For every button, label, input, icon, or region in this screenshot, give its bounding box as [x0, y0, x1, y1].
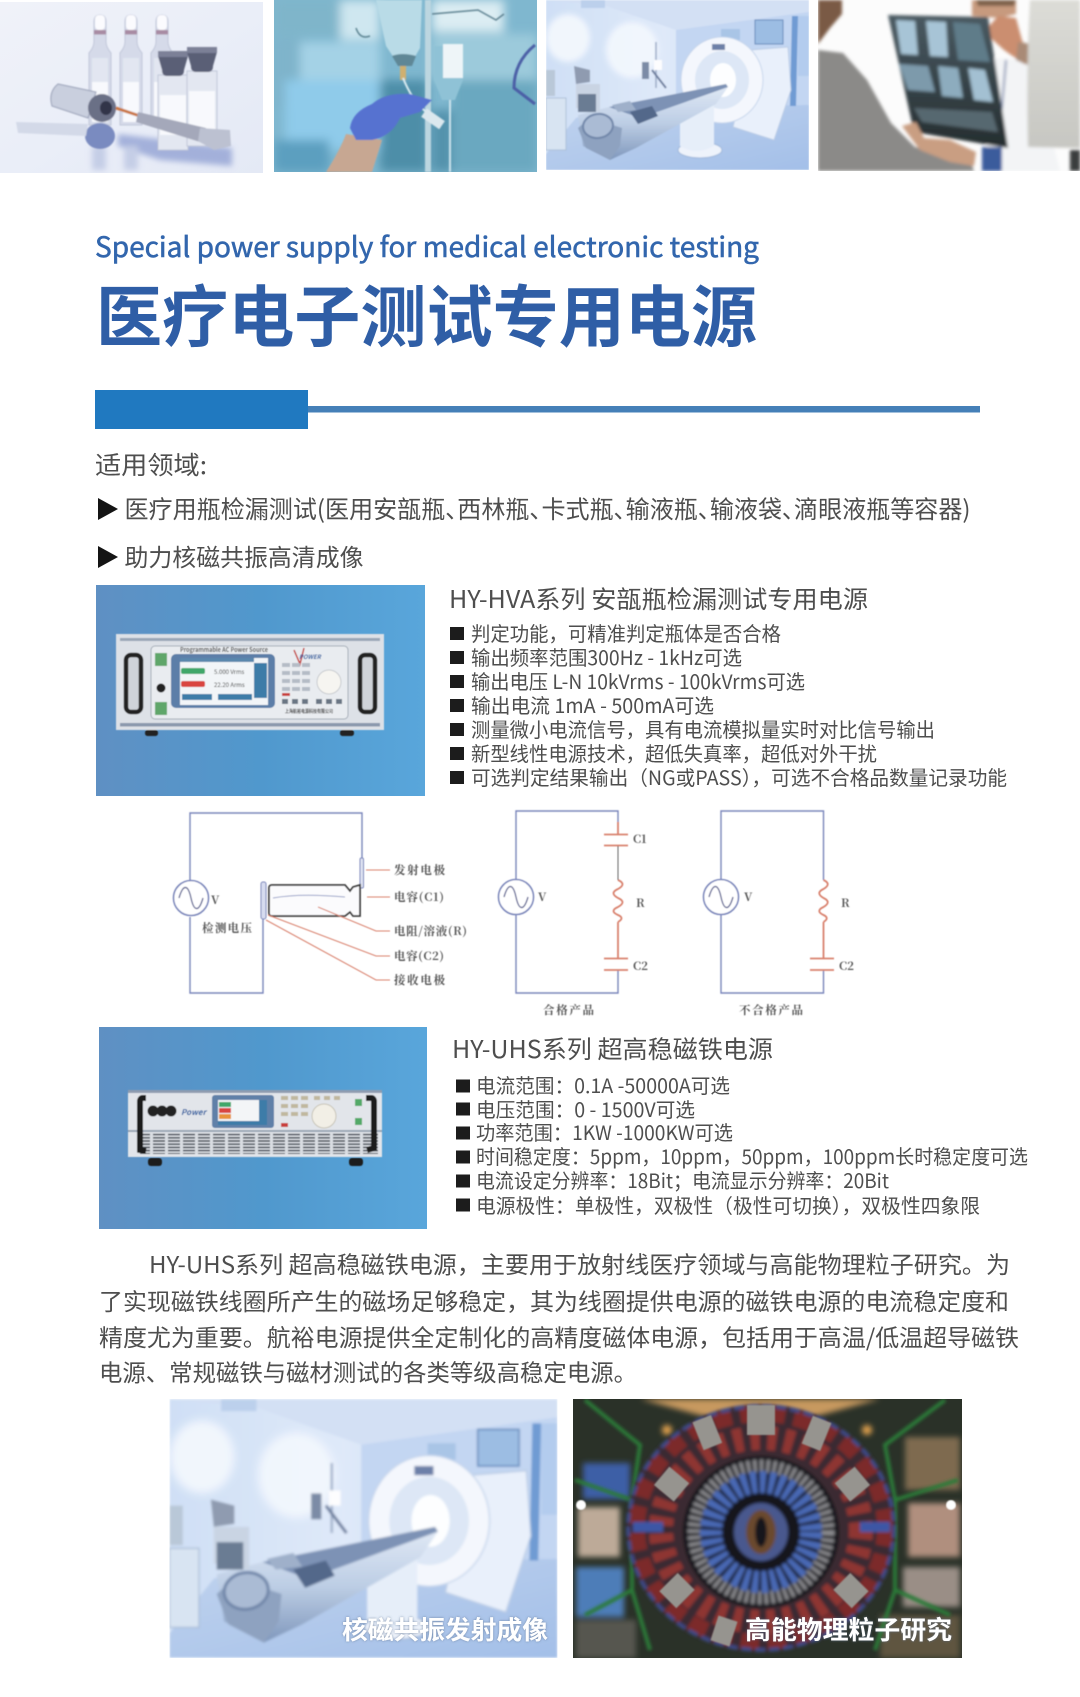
callout labels: 电容(C1)	[394, 889, 444, 905]
HY-HVA feature list	[450, 618, 1007, 791]
photo: particle physics detector with caption	[573, 1399, 962, 1658]
brand and title text: POWER	[299, 652, 322, 661]
caption: MRI: 核磁共振发射成像	[342, 1610, 548, 1647]
monitor	[1027, 0, 1080, 148]
HY-HVA heading: HY-HVA系列 安瓿瓶检漏测试专用电源	[449, 581, 868, 616]
description paragraph: 精度尤为重要。航裕电源提供全定制化的高精度磁体电源，包括用于高温/低温超导磁铁	[99, 1319, 1019, 1353]
ampoules	[89, 15, 173, 125]
touch screen: 5.000 Vrms	[214, 667, 245, 676]
logo: Power	[181, 1107, 208, 1118]
photo: CT scanner room	[546, 0, 809, 170]
feet	[148, 1158, 363, 1166]
description paragraph: 电源、常规磁铁与磁材测试的各类等级高稳定电源。	[99, 1354, 637, 1388]
HY-HVA feature list: 测量微小电流信号，具有电流模拟量实时对比信号输出	[471, 714, 935, 743]
touch screen	[171, 654, 275, 708]
syringe	[116, 108, 140, 116]
lying vial	[51, 84, 96, 118]
caption: particle physics: 高能物理粒子研究	[745, 1610, 952, 1647]
diagram: passing product circuit: C1	[633, 831, 646, 847]
touch screen: 22.20 Arms	[214, 680, 245, 689]
feet	[145, 730, 354, 736]
diagram: failing product circuit: R	[841, 895, 850, 911]
arm	[326, 134, 382, 172]
patient hoodie	[818, 50, 974, 171]
HY-HVA feature list: 可选判定结果输出（NG或PASS），可选不合格品数量记录功能	[471, 762, 1007, 791]
section divider bar	[95, 390, 980, 429]
HY-HVA feature list: 输出电压 L-N 10kVrms - 100kVrms可选	[471, 666, 805, 695]
diagram: failing product circuit: C2	[839, 958, 854, 974]
device chassis	[116, 634, 384, 730]
HY-HVA feature list: 判定功能，可精准判定瓶体是否合格	[471, 618, 781, 647]
knob	[312, 1104, 336, 1128]
drip chamber	[434, 46, 463, 100]
green buttons	[155, 653, 167, 715]
HY-UHS feature list: 电源极性：单极性，双极性（极性可切换），双极性四象限	[476, 1190, 980, 1219]
patient hand	[902, 122, 976, 166]
vial outline	[269, 885, 360, 916]
callout lines	[266, 870, 390, 980]
callout labels: V	[211, 892, 220, 908]
diagram: failing product circuit: 不合格产品	[739, 1002, 804, 1018]
keypad	[281, 1096, 340, 1127]
handles	[140, 1098, 374, 1151]
diagram: passing product circuit: 合格产品	[543, 1002, 594, 1018]
photo: IV drip bag and gloved hand	[274, 0, 537, 172]
MRI film	[888, 15, 1008, 148]
blue glove	[350, 94, 432, 140]
green frame	[575, 1400, 958, 1650]
diagram: passing product circuit: C2	[633, 958, 648, 974]
knob	[317, 670, 341, 694]
HY-UHS feature list: 电流设定分辨率：18Bit；电流显示分辨率：20Bit	[476, 1165, 889, 1194]
HY-UHS feature list: 电流范围：0.1A -50000A可选	[476, 1070, 730, 1099]
field item 2: 助力核磁共振高清成像	[124, 538, 364, 573]
patient hair	[818, 0, 842, 44]
main title: 医疗电子测试专用电源	[96, 264, 757, 361]
barrel rings	[626, 1404, 896, 1652]
panel: HY-UHS product image	[99, 1027, 427, 1229]
applicable fields label: 适用领域:	[95, 446, 207, 482]
panel: HY-HVA product image	[96, 585, 425, 796]
touch screen	[212, 1095, 274, 1128]
callout labels: 电容(C2)	[394, 948, 444, 964]
vials	[158, 47, 217, 150]
photo: MRI imaging with caption	[170, 1399, 557, 1658]
doctor coat	[985, 58, 1060, 171]
callout labels	[202, 862, 467, 988]
HY-HVA feature list: 输出电流 1mA - 500mA可选	[471, 690, 714, 719]
diagram: vial test setup	[174, 813, 467, 993]
description paragraph	[99, 1246, 1019, 1388]
HY-UHS heading: HY-UHS系列 超高稳磁铁电源	[452, 1031, 773, 1066]
reflections on table	[92, 134, 232, 170]
bag	[376, 0, 422, 56]
handles	[126, 655, 375, 712]
HY-HVA feature list: 输出频率范围300Hz - 1kHz可选	[471, 642, 742, 671]
callout labels: 检测电压	[202, 920, 252, 936]
description paragraph: HY-UHS系列 超高稳磁铁电源，主要用于放射线医疗领域与高能物理粒子研究。为	[149, 1246, 1010, 1280]
diagram: passing product circuit: R	[636, 895, 645, 911]
callout labels: 接收电极	[394, 972, 446, 988]
pole	[425, 0, 431, 172]
diagram: passing product circuit: V	[538, 889, 547, 905]
green buttons	[355, 1099, 362, 1125]
diagram: failing product circuit: V	[744, 889, 753, 905]
brand and title text: Programmable AC Power Source	[180, 644, 268, 654]
doctor head and hands	[972, 0, 1016, 18]
HY-UHS feature list: 电压范围：0 - 1500V可选	[476, 1094, 695, 1123]
keypad	[282, 663, 342, 704]
callout labels: 发射电极	[394, 862, 446, 878]
output terminals	[148, 1106, 176, 1116]
vent grille	[140, 1133, 378, 1154]
steel plates	[654, 1405, 870, 1646]
HY-UHS feature list	[456, 1070, 1028, 1219]
photo: doctor reviewing MRI film	[818, 0, 1080, 171]
brand and title text	[180, 644, 333, 715]
HY-UHS feature list: 功率范围：1KW -1000KW可选	[476, 1117, 733, 1146]
field item 1: 医疗用瓶检漏测试(医用安瓿瓶、西林瓶、卡式瓶、输液瓶、输液袋、滴眼液瓶等容器)	[124, 491, 970, 526]
HY-HVA feature list: 新型线性电源技术，超低失真率，超低对外干扰	[471, 738, 877, 767]
callout labels: 电阻/溶液(R)	[394, 923, 467, 939]
diagram: failing product circuit	[704, 811, 854, 1018]
device chassis	[128, 1090, 382, 1157]
description paragraph: 了实现磁铁线圈所产生的磁场足够稳定，其为线圈提供电源的磁铁电源的电流稳定度和	[99, 1283, 1009, 1317]
brand and title text: 上海航裕电源科技有限公司	[285, 708, 333, 715]
diagram: passing product circuit	[498, 811, 648, 1018]
HY-UHS feature list: 时间稳定度：5ppm，10ppm，50ppm，100ppm长时稳定度可选	[476, 1141, 1028, 1170]
photo: ampoules and vials	[0, 2, 263, 173]
English subtitle: Special power supply for medical electronic testing	[95, 226, 759, 266]
